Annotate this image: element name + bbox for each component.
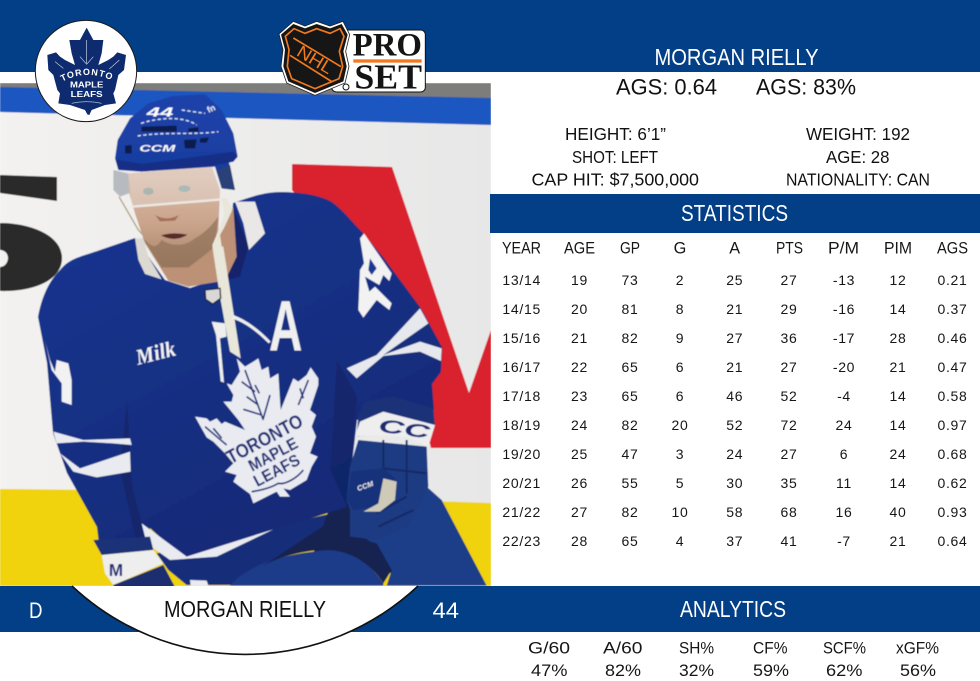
season 16/17: 16/17: [502, 359, 541, 375]
column headers: [502, 239, 968, 257]
season 14/15: 29: [781, 301, 797, 317]
right glove: [347, 397, 435, 540]
season 17/18: 14: [890, 388, 906, 404]
season 17/18: 0.58: [937, 388, 968, 404]
helmet number and brand: CCM: [139, 143, 176, 153]
season 17/18: 17/18: [502, 388, 541, 404]
column headers: YEAR: [502, 239, 541, 257]
analytics values: 32%: [679, 661, 714, 680]
AGS summary: AGS: 0.64: [616, 74, 717, 100]
analytics values: 47%: [531, 661, 568, 680]
season 16/17: 6: [676, 359, 684, 375]
column headers: AGS: [937, 239, 968, 257]
head and helmet, traced at 3x: [113, 94, 265, 290]
player bio right column: [786, 124, 930, 190]
analytics values: 82%: [605, 661, 641, 680]
season 17/18: 6: [676, 388, 684, 404]
season 15/16: 27: [726, 330, 743, 346]
player bio left column: SHOT: LEFT: [572, 147, 658, 167]
left sleeve number: [45, 340, 72, 405]
season 21/22: 82: [622, 504, 638, 520]
season 21/22: 21/22: [502, 504, 541, 520]
position: D: [29, 598, 42, 623]
season 14/15: 8: [676, 301, 684, 317]
season 21/22: 27: [571, 504, 588, 520]
season 14/15: 14: [890, 301, 906, 317]
Pro Set wordmark: SET: [354, 58, 422, 97]
analytics labels: CF%: [753, 638, 788, 657]
NHL shield: NHL: [293, 41, 337, 78]
season 22/23: 28: [571, 533, 588, 549]
bottom blue band: [0, 586, 980, 632]
jersey maple leaf crest: TORONTO: [223, 411, 307, 469]
season 17/18: 46: [726, 388, 743, 404]
player bio left column: [532, 124, 699, 190]
season 18/19: 52: [726, 417, 743, 433]
season 18/19: 72: [781, 417, 797, 433]
collar shadow: [228, 207, 248, 280]
jersey details, traced at 3x: [132, 247, 302, 383]
jersey maple leaf crest: [195, 358, 318, 503]
season 15/16: 28: [890, 330, 906, 346]
season 18/19: 24: [571, 417, 588, 433]
player bio right column: WEIGHT: 192: [806, 124, 910, 144]
nose: [155, 215, 179, 221]
season 14/15: 0.37: [937, 301, 968, 317]
season 13/14: 12: [890, 272, 906, 288]
left glove: [92, 536, 176, 586]
season 22/23: 37: [726, 533, 743, 549]
lace: [212, 198, 233, 248]
season 19/20: 0.68: [937, 446, 968, 462]
season 20/21: 35: [781, 475, 797, 491]
season 19/20: 24: [890, 446, 906, 462]
analytics labels: SH%: [679, 638, 714, 657]
season 17/18: 65: [622, 388, 638, 404]
statistics header band: [490, 194, 980, 233]
column headers: PTS: [776, 239, 803, 257]
season 16/17: 27: [781, 359, 797, 375]
logo wordmark: LEAFS: [71, 89, 103, 99]
NHL shield: [279, 21, 350, 95]
season 16/17: 0.47: [937, 359, 968, 375]
player photo: [0, 83, 491, 593]
column headers: AGE: [564, 239, 595, 257]
statistics header band: STATISTICS: [681, 200, 788, 226]
NHL Pro Set logo: [279, 21, 425, 97]
analytics values: [531, 661, 936, 680]
player name header: MORGAN RIELLY: [654, 44, 818, 70]
season 22/23: 65: [622, 533, 638, 549]
season 18/19: 82: [622, 417, 638, 433]
season 18/19: 24: [836, 417, 852, 433]
face: [128, 166, 220, 267]
season 21/22: 10: [672, 504, 688, 520]
season 13/14: 13/14: [502, 272, 541, 288]
logo wordmark: TORONTO: [60, 68, 112, 81]
season 20/21: 0.62: [937, 475, 968, 491]
season 21/22: 40: [890, 504, 906, 520]
neck crest: [205, 288, 221, 304]
visor: [128, 167, 220, 206]
season 16/17: 65: [622, 359, 638, 375]
top blue band: [0, 0, 980, 72]
season 14/15: 81: [622, 301, 638, 317]
column headers: P/M: [828, 239, 859, 257]
season 20/21: 30: [726, 475, 743, 491]
AGS summary: AGS: 83%: [756, 74, 856, 100]
Pro Set wordmark: PRO: [353, 26, 422, 62]
analytics values: 59%: [753, 661, 789, 680]
season 16/17: -20: [833, 359, 855, 375]
maple leaf: [47, 28, 126, 115]
season 16/17: 21: [890, 359, 906, 375]
season 19/20: 6: [840, 446, 848, 462]
season 18/19: [502, 417, 968, 433]
statistics table: [502, 239, 968, 549]
season 15/16: 36: [781, 330, 797, 346]
name plate: [72, 586, 418, 654]
analytics heading: ANALYTICS: [680, 596, 786, 622]
season 22/23: [502, 533, 968, 549]
season 15/16: 15/16: [502, 330, 541, 346]
helmet number and brand: 44: [145, 106, 173, 120]
analytics labels: SCF%: [823, 638, 866, 657]
lower body, traced at 3x: [45, 340, 435, 593]
right glove: CCM: [356, 479, 375, 493]
season 19/20: 24: [726, 446, 743, 462]
helmet: [115, 94, 238, 190]
season 13/14: 27: [781, 272, 797, 288]
season 14/15: 21: [726, 301, 743, 317]
letter A and trim: [211, 300, 302, 384]
analytics table: [528, 638, 939, 680]
season 18/19: 14: [890, 417, 906, 433]
Milk patch: Milk: [132, 336, 178, 370]
season 19/20: 47: [622, 446, 638, 462]
season 15/16: -17: [833, 330, 855, 346]
analytics values: 56%: [900, 661, 936, 680]
season 14/15: [502, 301, 968, 317]
letter A and trim: A: [269, 287, 302, 367]
season 22/23: 22/23: [502, 533, 541, 549]
helmet number and brand: fn: [205, 102, 217, 115]
season 13/14: 0.21: [937, 272, 968, 288]
season 21/22: 58: [726, 504, 743, 520]
season 15/16: 82: [622, 330, 638, 346]
player bio right column: AGE: 28: [826, 147, 890, 167]
season 20/21: 14: [890, 475, 906, 491]
season 13/14: 2: [676, 272, 684, 288]
season 18/19: 18/19: [502, 417, 541, 433]
analytics labels: G/60: [528, 638, 570, 657]
helmet number and brand: [139, 102, 217, 153]
player bio right column: NATIONALITY: CAN: [786, 170, 930, 190]
name plate: MORGAN RIELLY: [164, 596, 326, 622]
season 21/22: 16: [836, 504, 852, 520]
season 21/22: 68: [781, 504, 797, 520]
beard shading: [142, 217, 218, 267]
season 22/23: 4: [676, 533, 684, 549]
season 17/18: 23: [571, 388, 588, 404]
column headers: GP: [620, 239, 640, 257]
season 13/14: 19: [571, 272, 588, 288]
season 22/23: 0.64: [937, 533, 968, 549]
season 20/21: 26: [571, 475, 588, 491]
column headers: G: [674, 239, 686, 257]
season 15/16: 21: [571, 330, 588, 346]
left arm stripes: [53, 432, 132, 477]
season 13/14: 25: [726, 272, 743, 288]
analytics labels: xGF%: [896, 638, 939, 657]
AGS summary: [616, 74, 856, 100]
season 19/20: [502, 446, 968, 462]
mouth: [161, 233, 188, 239]
player bio left column: CAP HIT: $7,500,000: [532, 170, 699, 190]
neck: [145, 207, 238, 287]
season 17/18: [502, 388, 968, 404]
season 20/21: 5: [676, 475, 684, 491]
season 21/22: 0.93: [937, 504, 968, 520]
eyes: [143, 185, 190, 195]
season 17/18: -4: [837, 388, 851, 404]
torso base and pants: [157, 487, 487, 586]
season 14/15: 14/15: [502, 301, 541, 317]
season 21/22: [502, 504, 968, 520]
season 17/18: 52: [781, 388, 797, 404]
season 20/21: 20/21: [502, 475, 541, 491]
lace lower: [212, 247, 241, 358]
season 20/21: [502, 475, 968, 491]
season 22/23: -7: [837, 533, 851, 549]
season 18/19: 20: [672, 417, 688, 433]
season 15/16: 9: [676, 330, 684, 346]
white strip under top band: [0, 72, 491, 83]
jersey maple leaf crest: MAPLE: [245, 434, 301, 475]
season 16/17: 21: [726, 359, 743, 375]
season 16/17: 22: [571, 359, 588, 375]
season 20/21: 55: [622, 475, 638, 491]
jersey number: 44: [432, 598, 459, 623]
logo wordmark: MAPLE: [70, 79, 104, 89]
left glove: M: [109, 560, 123, 580]
collar: [235, 202, 265, 250]
right sleeve number and stripes, traced at 3x: [347, 233, 442, 378]
column headers: PIM: [884, 239, 912, 257]
column headers: A: [729, 239, 740, 257]
right glove: CC: [377, 415, 432, 443]
season 13/14: 73: [622, 272, 638, 288]
season 19/20: 25: [571, 446, 588, 462]
season 18/19: 0.97: [937, 417, 968, 433]
season 22/23: 21: [890, 533, 906, 549]
Pro Set wordmark: [343, 26, 422, 97]
photo background: rink boards: [0, 83, 491, 586]
season 13/14: -13: [833, 272, 855, 288]
season 19/20: 27: [781, 446, 797, 462]
season 19/20: 3: [676, 446, 684, 462]
season 19/20: 19/20: [502, 446, 541, 462]
team logo: [34, 20, 138, 122]
jersey: [38, 192, 442, 562]
analytics values: 62%: [826, 661, 862, 680]
season 16/17: [502, 359, 968, 375]
analytics labels: A/60: [603, 638, 642, 657]
season 14/15: -16: [833, 301, 855, 317]
season 15/16: 0.46: [937, 330, 968, 346]
jersey maple leaf crest: LEAFS: [250, 450, 303, 491]
season 20/21: 11: [836, 475, 852, 491]
season 22/23: 41: [781, 533, 797, 549]
analytics labels: [528, 638, 939, 657]
season 14/15: 20: [571, 301, 588, 317]
jersey hem: [142, 523, 273, 560]
season 15/16: [502, 330, 968, 346]
player bio left column: HEIGHT: 6’1”: [565, 124, 666, 144]
logo wordmark: [60, 68, 112, 99]
season 13/14: [502, 272, 968, 288]
